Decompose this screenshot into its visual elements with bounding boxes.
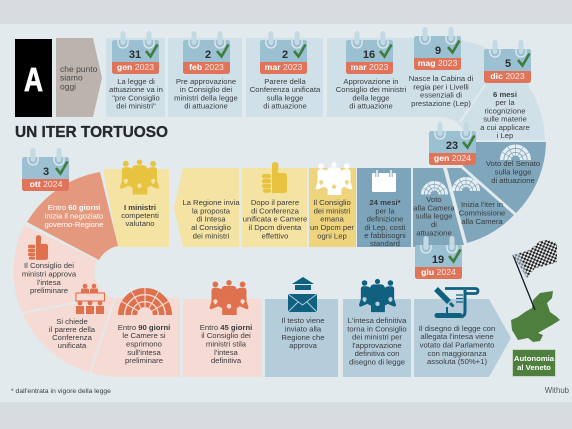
text: approva intesa preliminare: l'intesa	[37, 278, 62, 287]
panel: iter in Commissione	[447, 168, 514, 243]
text: ministri competenti: valutano	[125, 219, 155, 228]
text: 24 mesi: e fabbisogni	[364, 231, 406, 240]
panel: Dpcm effettivo	[242, 162, 307, 247]
text: intesa definitiva: torna in Consiglio	[347, 324, 407, 333]
panel: 2 febbraio 2023: ministri della legge	[174, 93, 238, 102]
panel: 2 marzo 2023: sulla legge	[267, 93, 303, 102]
panel: 2 febbraio 2023: di attuazione	[184, 102, 228, 110]
panel: 45 giorni	[183, 280, 262, 377]
text: 6 mesi: 6 mesi	[493, 90, 517, 99]
calendar: 2 mar 2023	[260, 31, 307, 74]
panel: 2 marzo 2023: Parere della	[264, 77, 306, 86]
text: disegno di legge: votato dal Parlamento	[420, 340, 494, 349]
text: voto Senato: di attuazione	[491, 176, 535, 185]
calendar: 2 feb 2023: 2	[205, 49, 211, 61]
panel: 60 giorni: Entro 60 giorni	[48, 203, 100, 212]
panel: pink curved segment	[13, 225, 180, 377]
label: Autonomia al Veneto	[512, 350, 556, 376]
text: iter Commissione: Commissione	[459, 208, 505, 218]
text: 45 giorni: Entro 45 giorni	[200, 323, 252, 332]
text: 6 mesi: sulle materie	[483, 115, 527, 124]
text: 24 mesi: 24 mesi*	[369, 198, 401, 207]
text: 16 marzo 2023: di attuazione	[349, 102, 393, 110]
text: voto Camera: sulla legge	[416, 212, 452, 221]
calendar: 2 feb 2023: feb 2023	[189, 62, 224, 72]
calendar: 31 gen 2023: 31	[129, 49, 141, 61]
panel: Regione invia: dei ministri	[193, 231, 230, 240]
calendar: 9 mag 2023: 9	[435, 45, 441, 57]
text: voto Camera: attuazione	[416, 228, 452, 237]
panel: 31 gennaio 2023: attuazione va in	[109, 85, 163, 94]
text: 16 marzo 2023: della legge	[352, 93, 390, 102]
text: 45 giorni: ministri stila	[206, 339, 247, 348]
text: voto Camera: alla Camera	[413, 203, 455, 212]
text: intesa definitiva: definitiva con	[355, 349, 399, 358]
bottom band	[0, 402, 572, 429]
text: Consiglio emana Dpcm: emana	[320, 215, 344, 224]
text: intesa definitiva: dei ministri per	[352, 333, 402, 342]
text: 90 giorni: le Camere si	[122, 331, 166, 340]
panel: testo inviato	[265, 277, 338, 377]
calendar: 2 mar 2023: 2	[282, 49, 288, 61]
text: 90 giorni: sull'intesa	[127, 348, 161, 357]
calendar: 16 mar 2023: mar 2023	[351, 62, 389, 72]
text: disegno di legge: assoluta (50%+1)	[427, 357, 487, 366]
icon: emiciclo Senato	[502, 144, 529, 164]
panel: ministri competenti	[103, 159, 169, 247]
calendar: 2 feb 2023	[183, 31, 230, 74]
panel: Regione invia	[174, 168, 240, 247]
text: disegno di legge: allegata l'intesa viene	[420, 332, 494, 341]
icon: yellow thumb	[262, 162, 287, 193]
text: voto Camera: Voto	[426, 195, 442, 204]
panel: disegno di legge arrow	[414, 288, 511, 377]
icon: orange people	[210, 280, 248, 315]
text: ministri competenti: I ministri	[124, 203, 156, 212]
panel: curved top right segment	[327, 38, 545, 140]
icon: pink thumb	[28, 235, 48, 260]
calendar: 3 ott 2024: 3	[43, 166, 49, 178]
footnote: * dall'entrata in vigore della legge	[11, 388, 111, 395]
top band	[0, 0, 572, 24]
panel: Dpcm per ogni Lep	[309, 162, 356, 247]
icon: conference table	[76, 284, 104, 314]
text: parere Conferenza: unificata	[58, 341, 87, 350]
icon: yellow people	[120, 159, 159, 195]
calendar: 9 mag 2023	[414, 27, 461, 70]
text: 16 marzo 2023: Approvazione in	[343, 77, 399, 86]
text: Dopo il parere: unificata e Camere	[243, 215, 307, 224]
text: disegno di legge: con maggioranza	[428, 349, 487, 358]
panel: voto alla Camera	[413, 168, 464, 247]
text: 90 giorni: Entro 90 giorni	[118, 323, 170, 332]
text: voto Camera: di	[431, 220, 437, 229]
text: Dopo il parere: Dopo il parere	[251, 198, 299, 207]
calendar: 16 mar 2023	[346, 31, 393, 74]
panel: 60 giorni: inizia il negoziato	[45, 211, 103, 220]
panel: Regione invia: la proposta	[192, 206, 231, 215]
calendar: 23 gen 2024: 23	[446, 140, 458, 152]
text: parere Conferenza: il parere della	[49, 325, 96, 334]
icon: house and envelope	[288, 277, 317, 312]
title: UN ITER TORTUOSO	[15, 124, 168, 141]
text: voto Senato: sulla legge	[495, 168, 531, 176]
text: 6 mesi: per la	[495, 98, 515, 107]
text: iter Commissione: Inizia l'iter in	[461, 200, 503, 209]
panel: intesa definitiva	[343, 279, 411, 377]
arrow: che punto siamo oggi	[56, 38, 102, 117]
text: voto Senato: Voto del Senato	[486, 159, 540, 168]
panel: 31 gennaio 2023	[106, 38, 165, 117]
label: Autonomia al Veneto: Autonomia	[514, 354, 555, 363]
icon: white calendar	[372, 170, 396, 192]
text: 24 mesi: definizione	[367, 215, 403, 224]
section letter A: A	[24, 61, 43, 98]
text: 24 mesi: di Lep, costi	[364, 223, 406, 232]
calendar: 5 dic 2023: dic 2023	[490, 71, 525, 81]
text: approva intesa preliminare: Il Consiglio dei	[24, 261, 74, 270]
calendar: 5 dic 2023: 5	[505, 58, 511, 70]
text: 45 giorni: il Consiglio dei	[201, 331, 251, 340]
panel: 2 marzo 2023	[246, 38, 323, 117]
panel: 31 gennaio 2023: La legge di	[117, 77, 155, 86]
text: intesa definitiva: l'approvazione	[352, 341, 402, 350]
text: Consiglio emana Dpcm: dei ministri	[314, 206, 351, 215]
panel: Regione invia: di Intesa	[196, 215, 226, 224]
text: Dopo il parere: il Dpcm diventa	[249, 223, 302, 232]
panel: 2 marzo 2023: Conferenza unificata	[250, 85, 321, 94]
text: il testo viene inviato: approva	[289, 341, 318, 350]
text: ministri competenti: competenti	[121, 211, 159, 220]
panel: 2 febbraio 2023: Pre approvazione	[176, 77, 236, 86]
panel: 24 mesi	[357, 168, 411, 248]
icon: scroll and pen	[436, 288, 478, 317]
text: 6 mesi: ricognizione	[484, 106, 526, 115]
text: 90 giorni: esprimono	[126, 339, 162, 348]
panel: 2 marzo 2023: di attuazione	[263, 102, 307, 110]
calendar: 3 ott 2024	[22, 148, 69, 191]
arrow: che punto siamo oggi: siamo	[60, 73, 83, 83]
text: parere Conferenza: Conferenza	[52, 333, 93, 342]
icon: white people	[316, 162, 352, 195]
text: 9 maggio 2023: Nasce la Cabina di	[409, 74, 474, 83]
calendar: 2 mar 2023: mar 2023	[265, 62, 303, 72]
text: iter Commissione: alla Camera	[461, 217, 503, 226]
panel: Regione invia: al Consiglio	[191, 223, 231, 232]
text: approva intesa preliminare: ministri approva	[22, 270, 77, 278]
text: Consiglio emana Dpcm: ogni Lep	[317, 231, 347, 240]
panel: 2 febbraio 2023: in Consiglio dei	[180, 85, 232, 94]
calendar: 23 gen 2024: gen 2024	[434, 153, 471, 163]
text: il testo viene inviato: Il testo viene	[281, 316, 325, 325]
text: Consiglio emana Dpcm: Il Consiglio	[313, 198, 351, 207]
text: parere Conferenza: Si chiede	[56, 317, 88, 326]
calendar: 9 mag 2023: mag 2023	[418, 58, 457, 68]
icon: checkered flag	[513, 240, 557, 310]
calendar: 16 mar 2023: 16	[363, 49, 375, 61]
panel: 60 giorni	[27, 172, 118, 260]
text: intesa definitiva: L'intesa definitiva	[348, 316, 407, 325]
arrow: che punto siamo oggi: che punto	[60, 64, 98, 74]
icon: emiciclo Camera	[422, 181, 447, 198]
icon: teal people	[359, 279, 396, 312]
panel: Regione invia: La Regione invia	[182, 198, 240, 207]
text: 24 mesi: per la	[375, 206, 395, 215]
credit: Withub	[545, 386, 570, 395]
text: 45 giorni: definitiva	[211, 356, 242, 365]
calendar: 31 gen 2023	[112, 31, 159, 74]
panel: 31 gennaio 2023: "pre Consiglio	[112, 93, 160, 102]
calendar: 3 ott 2024: ott 2024	[30, 179, 63, 189]
text: 24 mesi: standard	[370, 239, 400, 248]
panel: 2 febbraio 2023	[168, 38, 242, 117]
text: 9 maggio 2023: prestazione (Lep)	[411, 99, 471, 108]
text: approva intesa preliminare: preliminare	[30, 286, 68, 295]
panel: 60 giorni: governo-Regione	[45, 220, 103, 229]
text: 90 giorni: preliminare	[125, 356, 163, 365]
text: 45 giorni: l'intesa	[214, 348, 239, 357]
label: Autonomia al Veneto: al Veneto	[517, 363, 551, 372]
text: 9 maggio 2023: essenziali di	[420, 91, 462, 100]
section letter A	[15, 39, 52, 117]
calendar: 23 gen 2024	[429, 122, 476, 165]
text: Dopo il parere: effettivo	[262, 231, 288, 240]
calendar: 19 giu 2024: 19	[432, 254, 444, 266]
calendar: 31 gen 2023: gen 2023	[117, 62, 154, 72]
text: Dopo il parere: di Conferenza	[251, 206, 300, 215]
text: 6 mesi: a cui applicare	[480, 123, 530, 132]
text: Consiglio emana Dpcm: un Dpcm per	[310, 223, 354, 232]
icon: orange hemicycle	[121, 288, 169, 322]
calendar: 19 giu 2024	[415, 236, 462, 279]
icon: emiciclo Commissione	[454, 177, 478, 195]
text: intesa definitiva: disegno di legge	[349, 358, 405, 366]
map: Veneto	[511, 291, 560, 342]
text: 16 marzo 2023: Consiglio dei ministri	[336, 85, 407, 94]
text: 6 mesi: i Lep	[497, 131, 513, 140]
text: disegno di legge: Il disegno di legge con	[419, 324, 495, 333]
text: il testo viene inviato: Regione che	[281, 333, 325, 342]
text: 9 maggio 2023: regia per i Livelli	[413, 82, 469, 91]
panel: voto del Senato	[463, 142, 546, 213]
arrow: che punto siamo oggi: oggi	[60, 81, 76, 91]
text: il testo viene inviato: inviato alla	[285, 324, 322, 334]
calendar: 19 giu 2024: giu 2024	[421, 267, 456, 277]
calendar: 5 dic 2023	[484, 40, 531, 83]
panel: 31 gennaio 2023: dei ministri"	[116, 102, 156, 110]
